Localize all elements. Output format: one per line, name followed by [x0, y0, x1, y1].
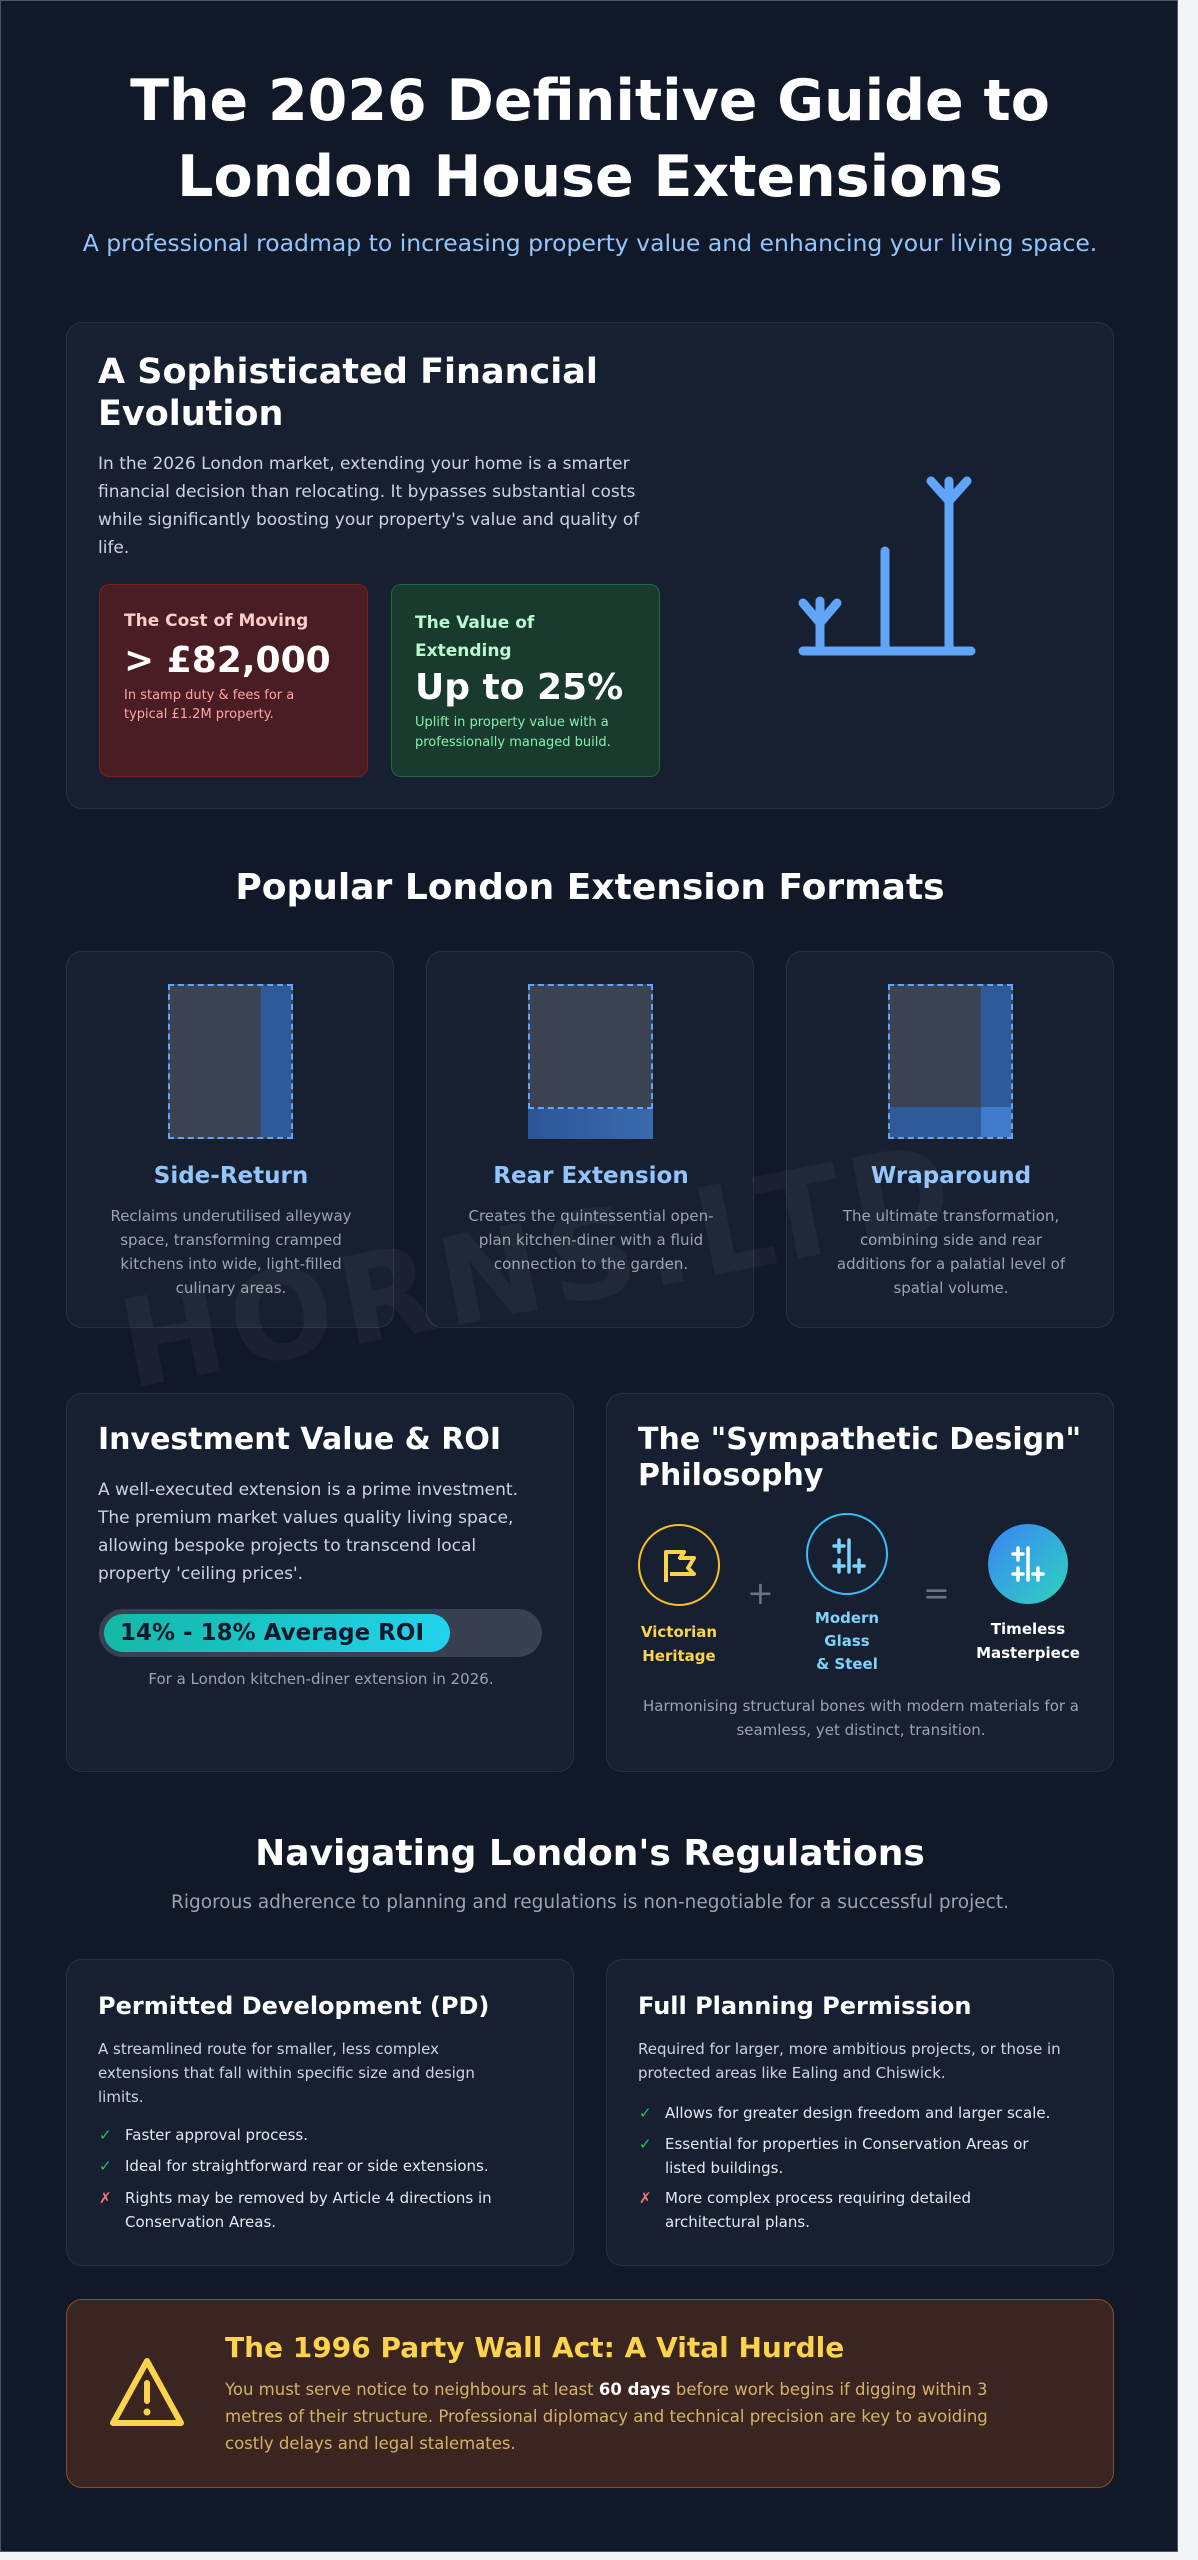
label: victorian heritage: Victorian — [641, 1623, 717, 1641]
ROI bar: 14% - 18% Average ROI — [120, 1620, 424, 1646]
diagram — [528, 984, 653, 1139]
label: modern glass steel: Modern — [815, 1609, 879, 1627]
panel: investment ROI — [66, 1393, 574, 1772]
card: cost of moving — [99, 584, 368, 777]
icon: modern glass steel — [806, 1513, 888, 1595]
icon: warning — [110, 2358, 184, 2426]
panel: side-return — [66, 951, 394, 1328]
label: modern glass steel: & Steel — [816, 1655, 878, 1673]
bullet list: More complex process requiring detailed architectural plans. — [665, 2189, 971, 2231]
subheading: Rigorous adherence to planning and regulations is non-negotiable for a successful project. — [171, 1892, 1009, 1913]
bullet list: Allows for greater design freedom and larger scale. — [665, 2104, 1050, 2122]
bullet list — [639, 2104, 1050, 2231]
equals sign: = — [923, 1574, 950, 1612]
panel: sympathetic design — [606, 1393, 1114, 1772]
card: value of extending: The Value of Extending — [415, 613, 534, 661]
label: modern glass steel — [815, 1609, 879, 1673]
icon: victorian heritage — [638, 1524, 720, 1606]
subtitle: A professional roadmap to increasing property value and enhancing your living space. — [83, 229, 1097, 257]
bullet list: Essential for properties in Conservation Areas or listed buildings. — [665, 2135, 1029, 2177]
card: value of extending — [391, 584, 660, 777]
label: victorian heritage — [641, 1623, 717, 1665]
label: timeless masterpiece: Masterpiece — [976, 1644, 1080, 1662]
bullet list — [99, 2126, 492, 2231]
label: timeless masterpiece — [976, 1620, 1080, 1662]
title: London House Extensions — [177, 144, 1003, 210]
diagram — [168, 984, 293, 1139]
card: value of extending: Uplift in property value with a professionally managed build. — [415, 715, 611, 750]
paragraph: A well-executed extension is a prime investment. The premium market values quality living space, allowing bespoke projects to transcend local property 'ceiling prices'. — [98, 1480, 518, 1584]
panel: permitted development: ✗ — [99, 2189, 112, 2207]
description: The ultimate transformation, combining side and rear additions for a palatial level of spatial volume. — [837, 1207, 1065, 1297]
bullet list: Ideal for straightforward rear or side extensions. — [125, 2157, 489, 2175]
card: cost of moving: The Cost of Moving — [124, 611, 308, 631]
heading: regulations: Navigating London's Regulations — [255, 1833, 925, 1874]
heading: Investment Value & ROI — [98, 1422, 501, 1457]
diagram — [888, 984, 1013, 1139]
plus sign: + — [747, 1574, 774, 1612]
heading: Full Planning Permission — [638, 1992, 971, 2020]
card: cost of moving: In stamp duty & fees for a typical £1.2M property. — [124, 688, 294, 722]
description: Reclaims underutilised alleyway space, transforming cramped kitchens into wide, light-filled culinary areas. — [110, 1207, 352, 1297]
heading: Permitted Development (PD) — [98, 1992, 489, 2020]
paragraph: Required for larger, more ambitious projects, or those in protected areas like Ealing and Chiswick. — [638, 2040, 1061, 2082]
bullet list: Rights may be removed by Article 4 directions in Conservation Areas. — [125, 2189, 492, 2231]
panel: permitted development — [66, 1959, 574, 2266]
description: Creates the quintessential open-plan kitchen-diner with a fluid connection to the garden. — [468, 1207, 714, 1273]
panel: permitted development: ✓ — [99, 2157, 112, 2175]
card: cost of moving: > £82,000 — [124, 640, 331, 681]
text: You must serve notice to neighbours at least 60 days before work begins if digging within 3 metres of their structure. Professional diplomacy and technical precision are key to avoiding costly delays and legal stalemates. — [225, 2380, 988, 2453]
panel: rear extension — [426, 951, 754, 1328]
label: victorian heritage: Heritage — [642, 1647, 716, 1665]
heading: extension formats: Popular London Extension Formats — [235, 867, 945, 908]
label: timeless masterpiece: Timeless — [991, 1620, 1065, 1638]
paragraph: A streamlined route for smaller, less complex extensions that fall within specific size and design limits. — [98, 2040, 475, 2106]
icon: bar chart growth — [798, 476, 976, 656]
caption: Harmonising structural bones with modern materials for a seamless, yet distinct, transition. — [643, 1697, 1079, 1739]
panel: full planning: ✓ — [639, 2135, 652, 2153]
watermark: HORNS.LTD — [109, 1115, 971, 1417]
panel: full planning: ✗ — [639, 2189, 652, 2207]
ROI bar — [99, 1609, 542, 1657]
panel: permitted development: ✓ — [99, 2126, 112, 2144]
title: Wraparound — [871, 1163, 1031, 1189]
panel: full planning: ✓ — [639, 2104, 652, 2122]
panel: full planning — [606, 1959, 1114, 2266]
card: value of extending: Up to 25% — [415, 667, 623, 708]
icon: timeless masterpiece — [988, 1524, 1068, 1604]
title: Side-Return — [154, 1163, 308, 1189]
caption: For a London kitchen-diner extension in 2026. — [148, 1670, 494, 1688]
paragraph: In the 2026 London market, extending your home is a smarter financial decision than relocating. It bypasses substantial costs while significantly boosting your property's value and quality of life. — [98, 454, 639, 558]
panel: wraparound — [786, 951, 1114, 1328]
heading: The "Sympathetic Design" Philosophy — [638, 1422, 1081, 1493]
title — [130, 68, 1050, 210]
heading: A Sophisticated Financial Evolution — [98, 352, 598, 434]
callout: party wall act — [66, 2299, 1114, 2488]
title: The 1996 Party Wall Act: A Vital Hurdle — [225, 2331, 844, 2364]
bullet list: Faster approval process. — [125, 2126, 308, 2144]
title: Rear Extension — [493, 1163, 689, 1189]
panel: financial evolution — [66, 322, 1114, 809]
label: modern glass steel: Glass — [824, 1632, 870, 1650]
title: The 2026 Definitive Guide to — [130, 68, 1050, 134]
